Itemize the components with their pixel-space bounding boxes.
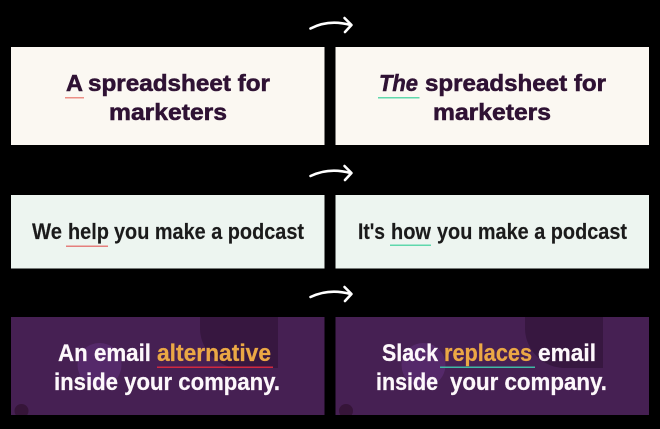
word: A: A bbox=[66, 70, 83, 96]
word: The: The bbox=[379, 70, 418, 96]
underline: A bbox=[65, 97, 84, 98]
word: alternative: alternative bbox=[157, 340, 271, 367]
text: We: We bbox=[32, 219, 62, 244]
text: email: email bbox=[538, 340, 596, 367]
underline: replaces bbox=[440, 366, 535, 368]
underline: help bbox=[66, 246, 108, 247]
text: inside: inside bbox=[376, 369, 438, 396]
arrow: row 3 bbox=[310, 287, 352, 301]
word: replaces: replaces bbox=[444, 340, 532, 367]
decorative shapes bbox=[14, 317, 278, 418]
text: Slack: Slack bbox=[382, 340, 438, 367]
text: inside your company: inside your company. bbox=[54, 369, 280, 396]
underline: The bbox=[378, 97, 420, 98]
underline: alternative bbox=[157, 366, 273, 368]
panel: it's how bbox=[336, 195, 649, 268]
text: you make a podcast: you make a podcast bbox=[114, 219, 305, 244]
decorative shapes bbox=[339, 317, 603, 418]
panel: the spreadsheet bbox=[336, 47, 649, 145]
panel: slack replaces bbox=[336, 317, 649, 418]
text: It's: It's bbox=[358, 219, 385, 244]
panel: we help bbox=[11, 195, 324, 268]
text: marketers: marketers bbox=[109, 99, 227, 125]
text: marketers: marketers bbox=[433, 99, 551, 125]
text: you make a podcast: you make a podcast bbox=[437, 219, 628, 244]
arrow: row 2 bbox=[310, 166, 352, 180]
underline: how bbox=[390, 244, 431, 246]
arrow: row 1 bbox=[310, 18, 352, 32]
text: your company: your company. bbox=[450, 369, 607, 396]
word: how: how bbox=[391, 219, 432, 244]
text: spreadsheet for: spreadsheet for bbox=[88, 70, 270, 96]
text: An email: An email bbox=[58, 340, 151, 367]
text: spreadsheet for: spreadsheet for bbox=[425, 70, 606, 96]
panel: an email alternative bbox=[11, 317, 324, 418]
panel: a spreadsheet bbox=[11, 47, 324, 145]
word: help: help bbox=[68, 219, 109, 244]
